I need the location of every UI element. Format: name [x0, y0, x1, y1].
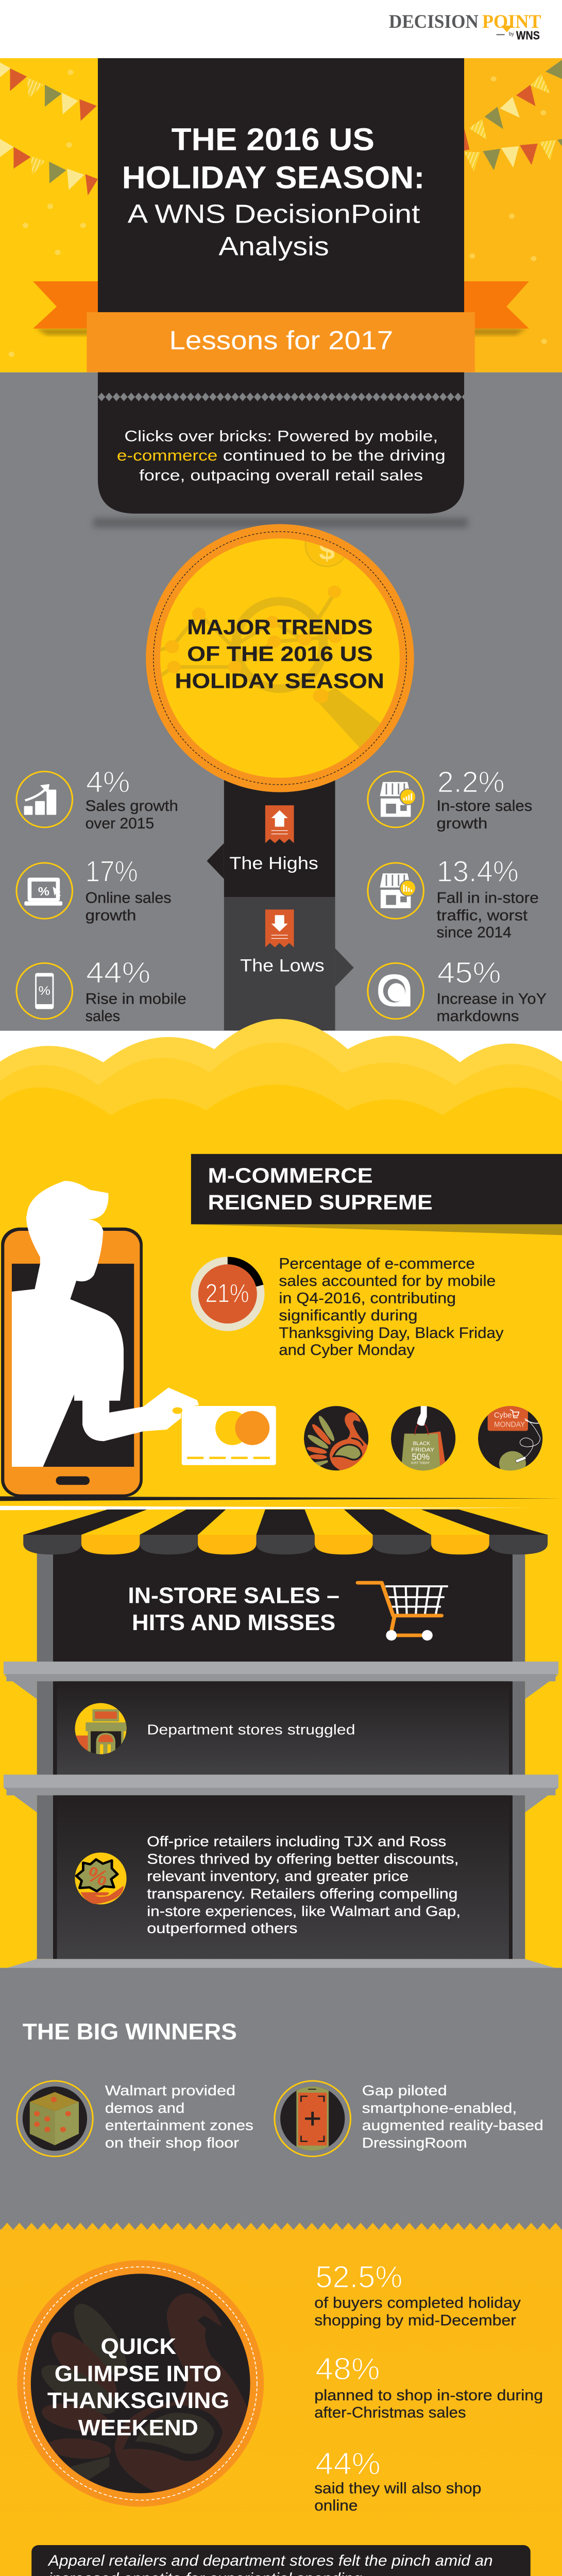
illustration: person reaching out of phone — [1, 1181, 199, 1497]
badge: major trends circle — [146, 523, 414, 792]
icon: down arrow bookmark — [265, 909, 294, 947]
badge: major trends circle: HOLIDAY SEASON — [175, 669, 384, 693]
badge: quick glimpse into thanksgiving weekend: THANKSGIVING — [47, 2388, 229, 2413]
stat: 52.5%: 52.5% — [315, 2260, 402, 2294]
icon: up arrow bookmark — [265, 805, 294, 843]
stat: 52.5%: of buyers completed holiday — [314, 2294, 521, 2311]
icon: store with falling chart — [380, 873, 416, 908]
winner: walmart: entertainment zones — [105, 2117, 253, 2133]
m-commerce description: Thanksgiving Day, Black Friday — [279, 1324, 504, 1342]
stat: 2.2% in-store sales growth: In-store sales — [436, 797, 532, 815]
icon: smartphone with percent: % — [39, 984, 50, 998]
stat: 17% online sales growth — [16, 855, 172, 924]
donut chart: 21% — [191, 1257, 264, 1331]
panel: off-price retailers: transparency. Retailers offering compelling — [147, 1886, 458, 1902]
shop awning — [23, 1510, 548, 1554]
section: in-store sales shop front — [0, 1536, 562, 2061]
section: major trends — [0, 515, 562, 1031]
panel: off-price retailers: Stores thrived by offering better discounts, — [147, 1851, 459, 1867]
section: big winners and thanksgiving — [0, 2061, 562, 2576]
panel: off-price retailers — [53, 1795, 513, 1959]
shelf: lower — [4, 1775, 558, 1812]
m-commerce description: in Q4-2016, contributing — [279, 1290, 456, 1307]
winner: gap: DressingRoom — [362, 2135, 467, 2151]
icon: cyber monday mouse — [478, 1405, 542, 1476]
section: m-commerce — [0, 1019, 562, 1546]
heading: in-store sales hits and misses: HITS AND MISSES — [132, 1610, 335, 1635]
icon: black friday bag: JUST TODAY — [411, 1462, 430, 1465]
stat: 2.2% in-store sales growth: 2.2% — [437, 766, 505, 799]
badge: quick glimpse into thanksgiving weekend — [17, 2260, 264, 2506]
logo: DecisionPoint by WNS — [389, 12, 541, 42]
panel: department stores — [53, 1681, 513, 1775]
badge: quick glimpse into thanksgiving weekend: GLIMPSE INTO — [55, 2361, 222, 2386]
icon: cyber monday mouse: MONDAY — [494, 1420, 525, 1429]
stat: 44%: online — [314, 2497, 357, 2514]
icon: discount hand: % — [83, 1862, 112, 1891]
title — [122, 122, 425, 261]
heading: in-store sales hits and misses — [128, 1583, 339, 1635]
panel: off-price retailers: Off-price retailers including TJX and Ross — [147, 1834, 446, 1850]
stat: 44% rise in mobile sales: sales — [86, 1007, 120, 1025]
stat: 13.4% fall in in-store traffic: traffic, worst — [436, 907, 528, 924]
m-commerce description: Percentage of e-commerce — [279, 1255, 475, 1272]
icon: shopping cart — [357, 1583, 448, 1640]
scalloped yellow edge — [0, 1019, 562, 1546]
ribbon tails — [33, 281, 529, 335]
title: A WNS DecisionPoint — [128, 200, 420, 229]
panel: department stores: Department stores struggled — [147, 1722, 355, 1738]
stat: 17% online sales growth: Online sales — [86, 889, 172, 906]
icon: augmented reality phone — [296, 2086, 329, 2151]
stat: 48%: planned to shop in-store during — [314, 2386, 543, 2404]
icon: cyber monday mouse: Cybe — [494, 1412, 512, 1420]
icon: black friday bag: FRIDAY — [411, 1447, 435, 1453]
panel: off-price retailers: outperformed others — [147, 1920, 298, 1937]
black title panel — [98, 58, 464, 514]
callout: apparel retailers — [31, 2545, 531, 2576]
stat: 13.4% fall in in-store traffic: 13.4% — [436, 855, 519, 888]
stat: 48% — [314, 2352, 543, 2421]
stat: 45% increase in markdowns — [368, 956, 547, 1025]
heading: m-commerce reigned supreme: REIGNED SUPREME — [208, 1191, 433, 1214]
icon: department store — [75, 1703, 127, 1755]
icon: laptop with percent: % — [38, 885, 49, 899]
icon: discount hand — [75, 1853, 127, 1904]
title: Analysis — [218, 232, 329, 261]
title: THE 2016 US — [172, 122, 374, 157]
stat: 13.4% fall in in-store traffic — [368, 855, 539, 941]
stat: 48%: 48% — [315, 2352, 380, 2386]
icon: laptop with percent — [24, 877, 62, 906]
stat: 44%: 44% — [315, 2447, 381, 2481]
logo: DecisionPoint by WNS: DECISION — [389, 12, 479, 32]
stat: 4% sales growth — [16, 766, 178, 832]
shelf: upper — [4, 1662, 558, 1699]
label: the highs: The Highs — [229, 853, 318, 873]
icon: black friday bag: BLACK — [413, 1441, 430, 1447]
stat: 17% online sales growth: 17% — [86, 855, 138, 888]
logo: DecisionPoint by WNS: by — [509, 31, 514, 37]
winner: gap: augmented reality-based — [362, 2117, 543, 2133]
m-commerce description: and Cyber Monday — [279, 1341, 415, 1359]
m-commerce description: sales accounted for by mobile — [279, 1272, 496, 1290]
icon: rising bar chart — [24, 784, 56, 815]
store frame — [0, 1536, 562, 1968]
bunting flags right — [464, 60, 562, 344]
stat: 44% rise in mobile sales — [16, 956, 186, 1025]
heading: the big winners: THE BIG WINNERS — [23, 2019, 237, 2044]
stat: 13.4% fall in in-store traffic: since 2014 — [436, 924, 512, 941]
section: header and title — [0, 12, 562, 516]
icons: thanksgiving, black friday, cyber monday — [304, 1405, 542, 1476]
central column: highs and lows — [207, 745, 354, 1030]
banner: lessons for 2017: Lessons for 2017 — [169, 326, 393, 355]
badge: quick glimpse into thanksgiving weekend: QUICK — [101, 2334, 177, 2359]
stat: 44%: said they will also shop — [314, 2480, 481, 2497]
heading: m-commerce reigned supreme: M-COMMERCE — [208, 1164, 373, 1188]
winner: gap: Gap piloted — [362, 2082, 447, 2099]
icon: smartphone with percent — [35, 973, 54, 1009]
stat: 4% sales growth: over 2015 — [86, 815, 154, 832]
stat: 44% rise in mobile sales: 44% — [86, 956, 150, 989]
stat: 4% sales growth: 4% — [86, 766, 130, 799]
stat: 45% increase in markdowns: markdowns — [436, 1007, 519, 1025]
winner: walmart: on their shop floor — [105, 2135, 239, 2151]
stat: 2.2% in-store sales growth: growth — [436, 815, 487, 832]
icon: markdown tag — [378, 974, 411, 1007]
winner: gap — [275, 2081, 543, 2157]
intro text: Clicks over bricks: Powered by mobile, — [124, 428, 438, 445]
icon: turkey — [304, 1406, 368, 1470]
icon: black friday bag: 50% — [412, 1451, 430, 1462]
credit card — [173, 1406, 276, 1465]
heading: in-store sales hits and misses: IN-STORE SALES – — [128, 1583, 339, 1608]
banner: lessons for 2017 — [87, 312, 475, 372]
icon: black friday bag — [391, 1405, 455, 1472]
stat: 2.2% in-store sales growth — [368, 766, 532, 832]
winner: walmart: demos and — [105, 2100, 184, 2116]
bunting flags left — [0, 62, 98, 357]
badge: quick glimpse into thanksgiving weekend: WEEKEND — [78, 2415, 198, 2441]
m-commerce description — [279, 1255, 504, 1359]
intro text: continued to be the driving — [223, 447, 446, 464]
badge: major trends circle: OF THE 2016 US — [187, 642, 373, 666]
stat: 52.5% — [314, 2260, 521, 2329]
stat: 45% increase in markdowns: Increase in YoY — [436, 990, 547, 1007]
stat: 45% increase in markdowns: 45% — [437, 956, 501, 989]
stat: 52.5%: shopping by mid-December — [314, 2312, 516, 2329]
badge: major trends circle: $ — [319, 536, 335, 566]
logo: DecisionPoint by WNS: WNS — [516, 29, 540, 42]
intro text: force, outpacing overall retail sales — [139, 467, 423, 484]
winner: walmart: Walmart provided — [105, 2082, 235, 2099]
stat: 44% — [314, 2447, 481, 2514]
icon: dice — [30, 2092, 79, 2145]
title: HOLIDAY SEASON: — [122, 160, 425, 195]
winner: gap: smartphone-enabled, — [362, 2100, 517, 2116]
label: the lows: The Lows — [240, 955, 325, 975]
donut chart: 21%: 21% — [206, 1279, 249, 1308]
stat: 48%: after-Christmas sales — [314, 2404, 466, 2421]
intro text: e-commerce — [117, 447, 217, 464]
logo: DecisionPoint by WNS: POINT — [482, 12, 541, 32]
badge: major trends circle: MAJOR TRENDS — [187, 616, 373, 639]
icon: store with rising chart — [380, 782, 416, 817]
stat: 44% rise in mobile sales: Rise in mobile — [86, 990, 186, 1007]
stat: 17% online sales growth: growth — [86, 907, 136, 924]
intro text — [117, 428, 446, 484]
panel: off-price retailers: relevant inventory, and greater price — [147, 1868, 408, 1885]
stat: 4% sales growth: Sales growth — [86, 797, 178, 815]
m-commerce description: significantly during — [279, 1307, 418, 1324]
stat: 13.4% fall in in-store traffic: Fall in in-store — [436, 889, 539, 906]
section: experience gifts and pitfalls — [31, 2545, 531, 2576]
panel: off-price retailers: in-store experiences, like Walmart and Gap, — [147, 1903, 461, 1919]
winner: walmart — [17, 2081, 253, 2157]
heading: m-commerce reigned supreme — [191, 1154, 562, 1235]
callout: apparel retailers: Apparel retailers and department stores felt the pinch amid an — [47, 2552, 493, 2569]
